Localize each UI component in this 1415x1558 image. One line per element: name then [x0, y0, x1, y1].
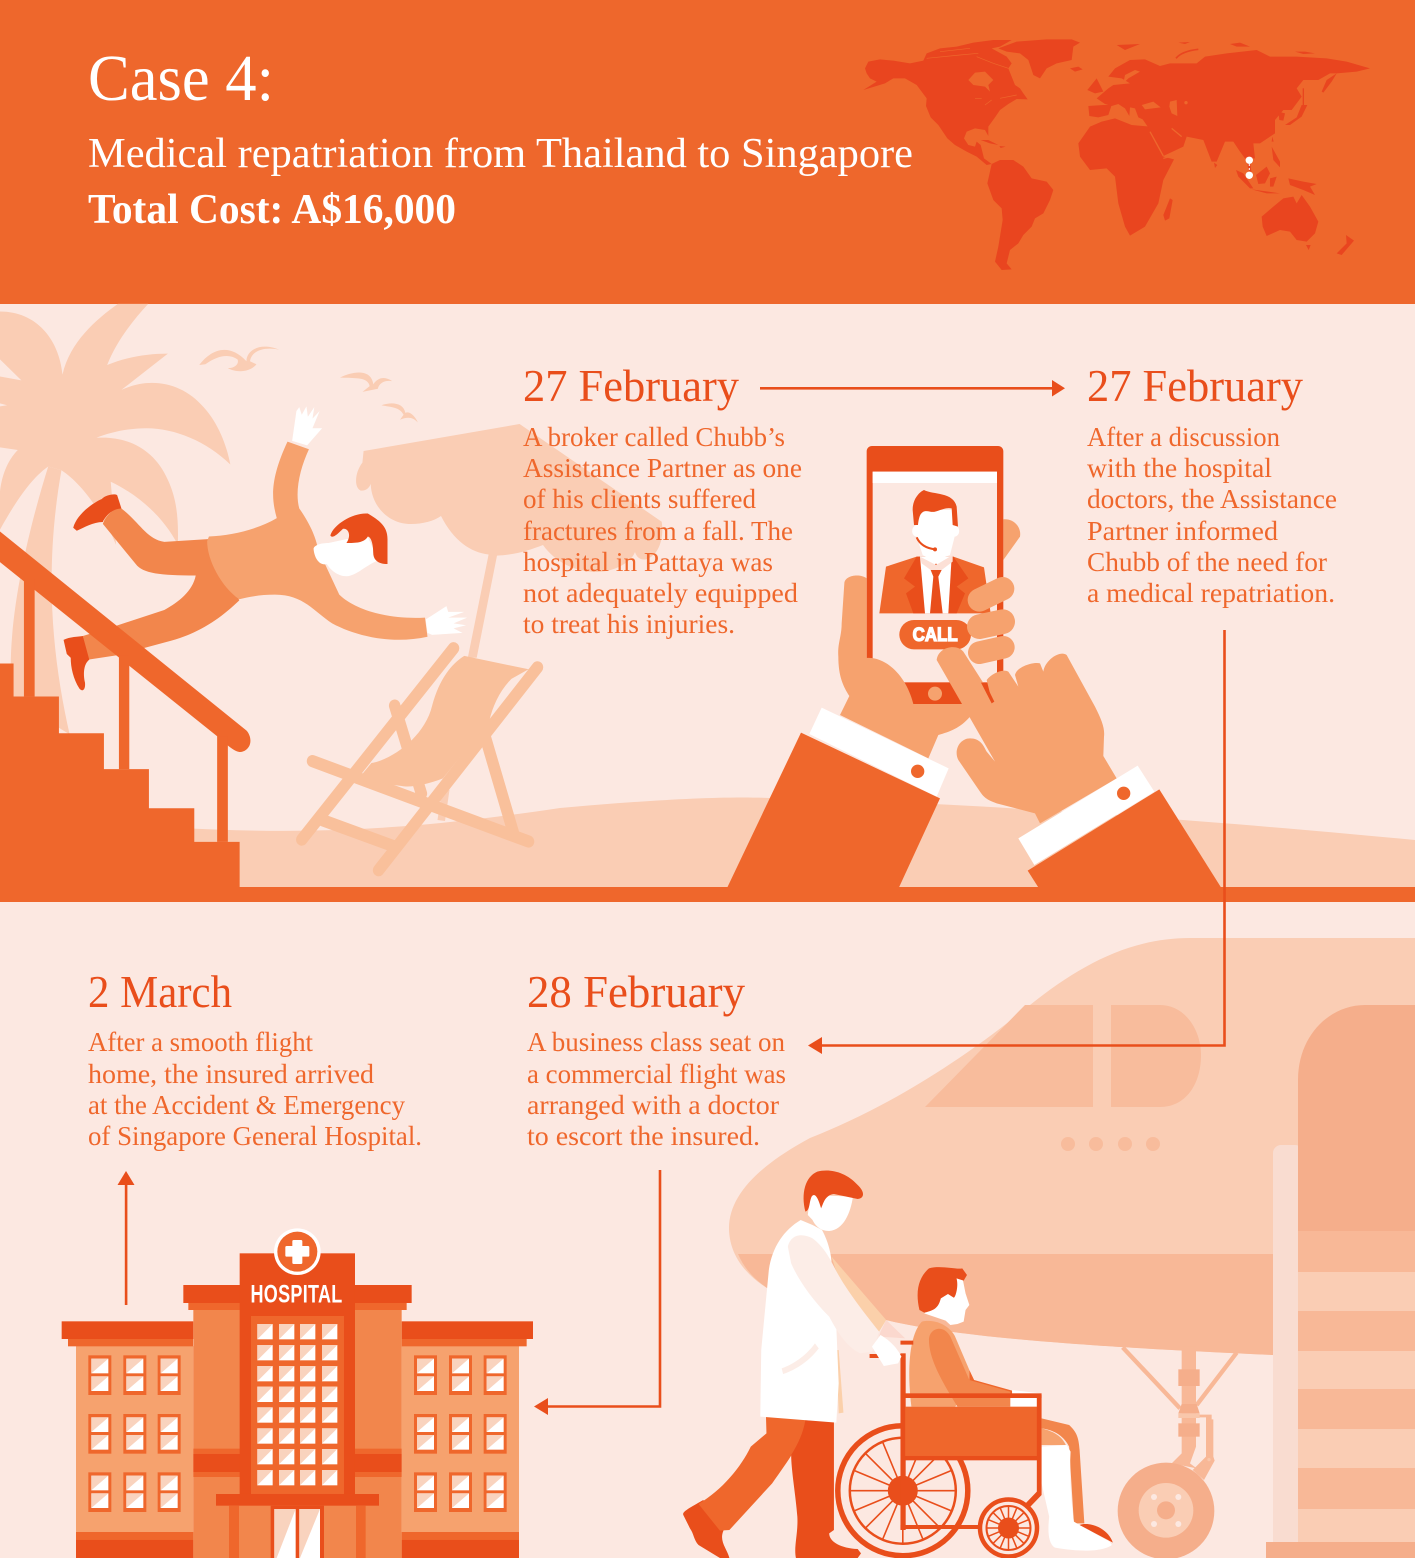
text block: 27 February discussion: Chubb of the need for — [1087, 547, 1327, 577]
hospital building — [62, 1228, 533, 1558]
world map — [863, 39, 1370, 270]
text block: 28 February — [527, 966, 786, 1151]
text block: 27 February broker call: Assistance Partner as one — [523, 453, 802, 483]
text block: 27 February broker call: of his clients suffered — [523, 484, 756, 514]
doctor legs — [683, 1257, 886, 1558]
left wing — [62, 1321, 193, 1558]
seagulls — [199, 347, 418, 422]
arrow: 27 February down to 28 February — [808, 630, 1224, 1054]
arrow: 28 February to hospital — [534, 1170, 660, 1415]
right hand — [937, 647, 1117, 823]
hospital sign text: HOSPITAL — [250, 1280, 344, 1308]
text block: 28 February: arranged with a doctor — [527, 1090, 779, 1120]
text block: 27 February broker call: 27 February — [523, 360, 739, 411]
airplane fuselage — [729, 938, 1415, 1355]
text block: 27 February discussion: After a discussion — [1087, 422, 1280, 452]
text block: 27 February discussion: a medical repatriation. — [1087, 578, 1335, 608]
americas and greenland — [863, 39, 1080, 270]
doctor — [760, 1170, 905, 1423]
staircase with handrail — [0, 532, 250, 889]
old world — [1070, 42, 1370, 255]
cockpit windows — [925, 1005, 1201, 1151]
text block: 28 February: to escort the insured. — [527, 1121, 760, 1151]
text block: 27 February broker call: not adequately equipped — [523, 578, 799, 608]
left hand — [838, 576, 1003, 758]
text block: 28 February: a commercial flight was — [527, 1059, 786, 1089]
text block: 2 March: of Singapore General Hospital. — [88, 1121, 422, 1151]
call button: CALL — [913, 625, 958, 646]
text block: 28 February: 28 February — [527, 966, 745, 1017]
text block: 2 March: at the Accident & Emergency — [88, 1090, 405, 1120]
palm tree — [0, 304, 230, 734]
phone and hands — [727, 446, 1221, 887]
text block: 27 February discussion: doctors, the Assistance — [1087, 484, 1337, 514]
call button — [899, 620, 971, 649]
title: Medical repatriation from Thailand to Singapore — [88, 131, 913, 177]
falling man — [64, 406, 467, 690]
beach sand — [180, 797, 1415, 887]
text block: 2 March: 2 March — [88, 966, 232, 1017]
arrow: hospital up to 2 March — [118, 1171, 134, 1305]
text block: 27 February broker call: hospital in Pattaya was — [523, 547, 773, 577]
title: Case 4: — [88, 42, 274, 115]
wheelchair wheels — [838, 1426, 1037, 1556]
text block: 27 February broker call: fractures from a fall. The — [523, 516, 793, 546]
text block: 27 February broker call — [523, 360, 802, 639]
finger behind phone — [1003, 519, 1020, 560]
deck chair — [302, 648, 537, 870]
header band — [0, 0, 1415, 304]
landing gear — [1118, 1347, 1237, 1558]
left cuff — [809, 708, 949, 797]
route marker: Thailand to Singapore — [1246, 157, 1253, 179]
patient in wheelchair — [909, 1267, 1113, 1551]
text block: 2 March — [88, 966, 422, 1151]
right wing — [402, 1321, 533, 1558]
text block: 2 March: After a smooth flight — [88, 1027, 313, 1057]
call agent portrait — [879, 490, 991, 613]
smartphone — [867, 446, 1003, 704]
title: Total Cost: A$16,000 — [88, 187, 456, 233]
wheel — [1118, 1463, 1214, 1558]
left sleeve — [727, 733, 940, 887]
text block: 2 March: home, the insured arrived — [88, 1059, 375, 1089]
medical cross sign — [274, 1228, 321, 1275]
right sleeve and cuff — [1018, 766, 1221, 887]
text block: 28 February: A business class seat on — [527, 1027, 785, 1057]
ground band — [0, 887, 1415, 902]
title — [88, 42, 913, 233]
central block — [183, 1253, 412, 1558]
text block: 27 February discussion: 27 February — [1087, 360, 1303, 411]
arrow: 27 February to 27 February — [760, 380, 1065, 396]
text block: 27 February discussion — [1087, 360, 1337, 608]
text block: 27 February broker call: A broker called Chubb’s — [523, 422, 785, 452]
text block: 27 February broker call: to treat his injuries. — [523, 609, 735, 639]
text block: 27 February discussion: Partner informed — [1087, 516, 1279, 546]
wheelchair frame and seat — [870, 1341, 1042, 1530]
aircraft door and boarding stairs — [1266, 1005, 1415, 1558]
text block: 27 February discussion: with the hospital — [1087, 453, 1272, 483]
beach umbrella — [356, 424, 662, 821]
